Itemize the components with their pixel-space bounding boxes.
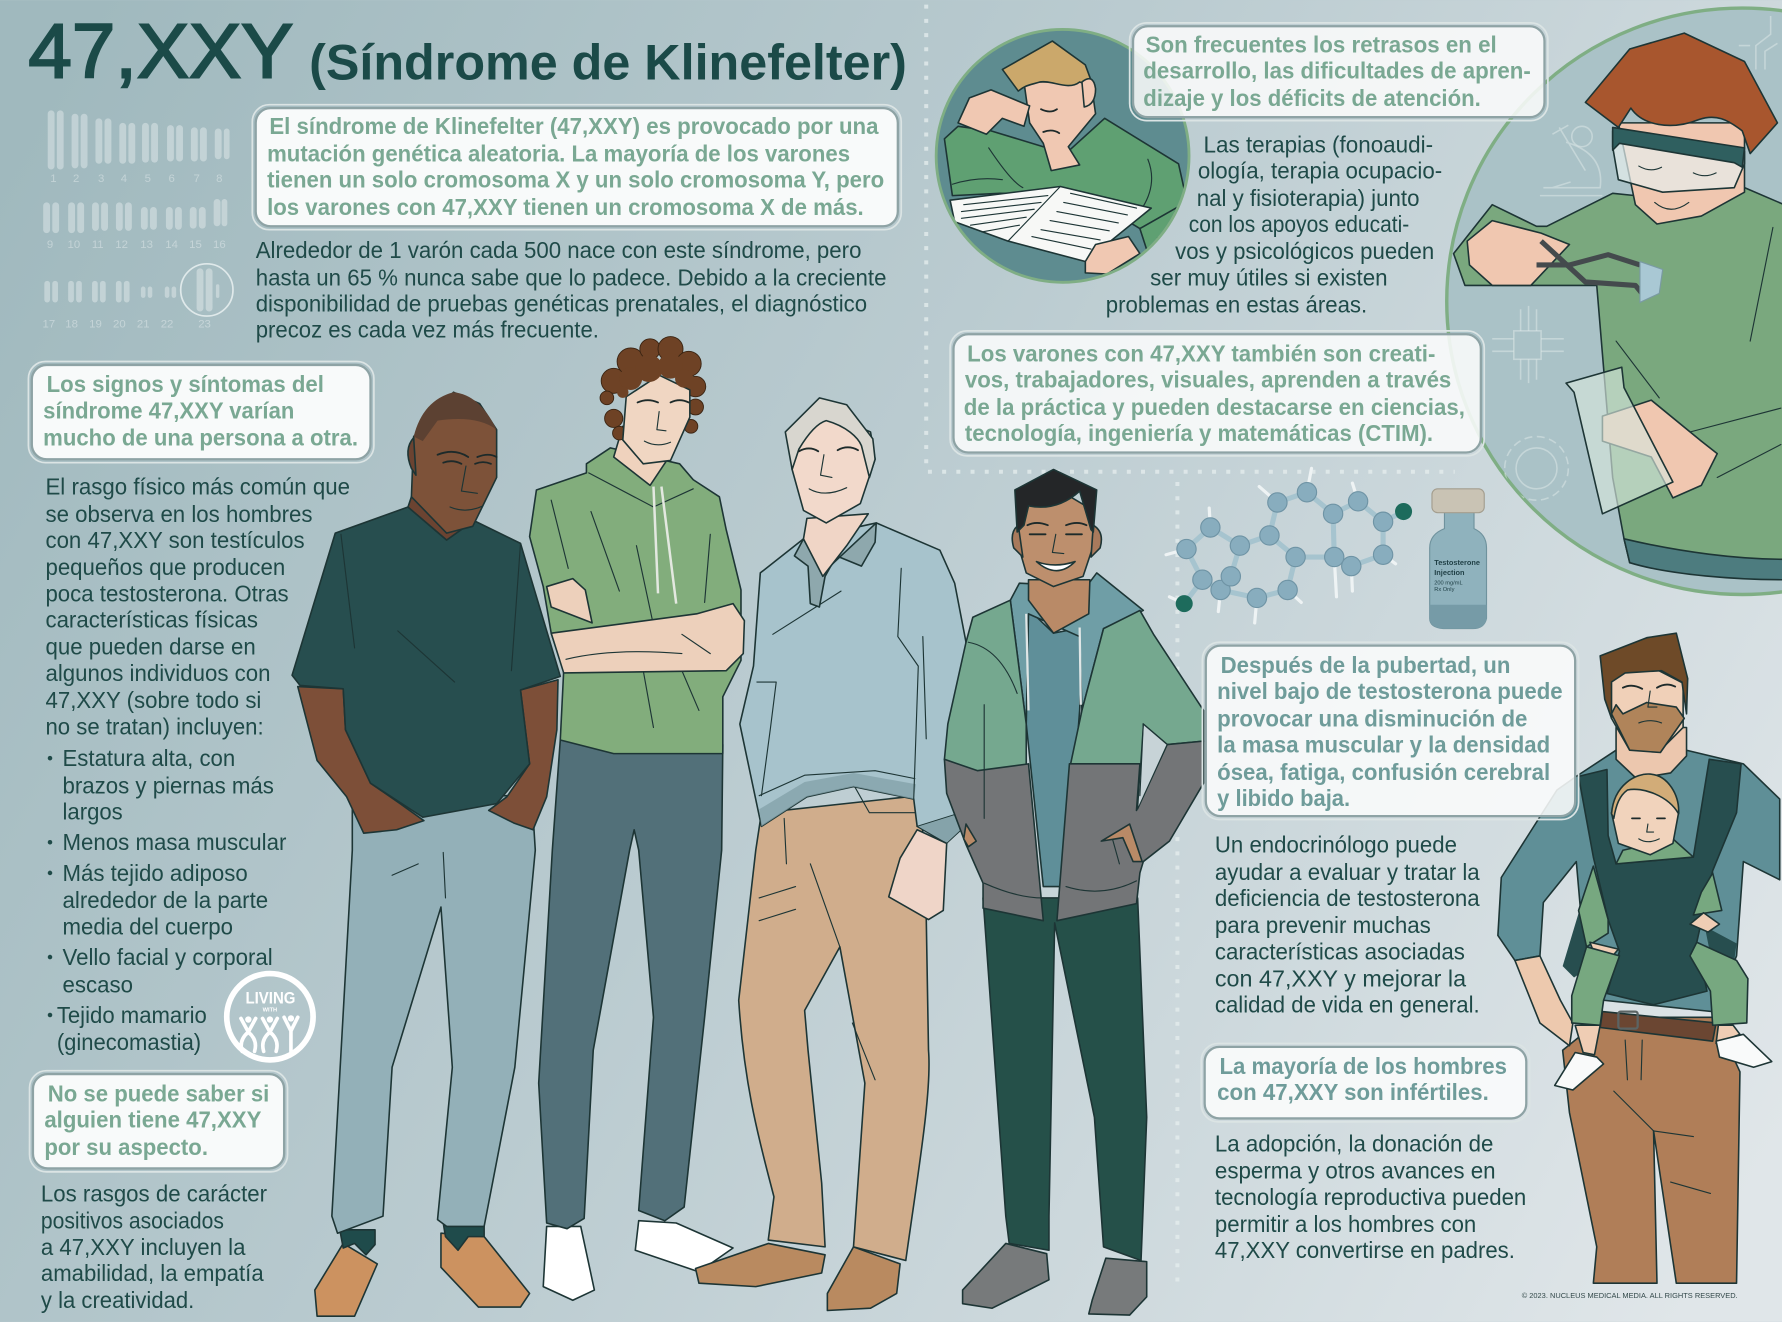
text: therapies: problemas en estas áreas. — [1106, 292, 1367, 318]
text: therapies: ología, terapia ocupacio- — [1198, 158, 1442, 184]
karyotype chromosome chart: 2 — [73, 173, 79, 185]
text: adoption: esperma y otros avances en — [1215, 1158, 1496, 1184]
figure: teen in lab with goggles, tongs and beaker — [1447, 8, 1782, 595]
title — [28, 8, 907, 94]
bullet list: features: Más tejido adiposo — [63, 860, 248, 886]
text: positive traits: amabilidad, la empatía — [41, 1260, 264, 1286]
callout: infertility — [1201, 1043, 1530, 1122]
callout: definition — [252, 105, 901, 230]
text: prevalence: disponibilidad de pruebas genéticas prenatales, el diagnóstico — [256, 291, 867, 317]
text: adoption: tecnología reproductiva pueden — [1215, 1184, 1526, 1210]
text: therapies: vos y psicológicos pueden — [1175, 238, 1434, 264]
callout: appearance: No se puede saber si — [48, 1080, 269, 1106]
text: adoption — [1215, 1130, 1526, 1263]
karyotype chromosome chart: 18 — [65, 318, 78, 330]
badge: Living with XXY — [227, 974, 313, 1060]
karyotype chromosome chart: 3 — [98, 173, 104, 185]
background icons: microscope, circuit, gear — [1492, 16, 1777, 500]
callout: low testosterone: nivel bajo de testosterona puede — [1217, 678, 1563, 704]
callout: infertility: con 47,XXY son infértiles. — [1217, 1079, 1489, 1105]
badge: Living with XXY: WITH — [263, 1008, 277, 1014]
karyotype chromosome chart: 21 — [137, 318, 150, 330]
bullet list: features: Vello facial y corporal — [63, 944, 273, 970]
callout: definition: tienen un solo cromosoma X y un solo cromosoma Y, pero — [267, 167, 884, 193]
vial: testosterone injection: Testosterone — [1434, 558, 1480, 567]
text: positive traits: positivos asociados — [41, 1208, 224, 1234]
karyotype chromosome chart: 19 — [89, 318, 102, 330]
karyotype chromosome chart: 15 — [189, 239, 202, 251]
callout: strengths — [950, 331, 1484, 456]
text: endocrinologist: características asociadas — [1215, 938, 1465, 964]
callout: signs and symptoms — [28, 362, 374, 463]
text: therapies: ser muy útiles si existen — [1150, 264, 1388, 290]
vial: testosterone injection: Rx Only — [1434, 587, 1455, 593]
karyotype chromosome chart: 9 — [47, 239, 53, 251]
callout: low testosterone: provocar una disminución de — [1217, 705, 1527, 731]
karyotype chromosome chart: 10 — [68, 239, 80, 251]
callout: signs and symptoms: Los signos y síntomas del — [47, 371, 324, 397]
callout: developmental delays — [1130, 23, 1548, 121]
callout: appearance: por su aspecto. — [44, 1134, 208, 1160]
callout: developmental delays: Son frecuentes los retrasos en el — [1146, 31, 1497, 57]
bullet list: features: media del cuerpo — [63, 913, 233, 939]
text: physical characteristics: se observa en los hombres — [45, 501, 313, 527]
bullet list: features: escaso — [63, 971, 133, 997]
karyotype chromosome chart: 7 — [193, 173, 200, 185]
molecule: testosterone — [1166, 468, 1412, 623]
bullet list: features: Tejido mamario — [57, 1002, 207, 1028]
callout: low testosterone: ósea, fatiga, confusión cerebral — [1217, 759, 1550, 785]
callout: low testosterone: Después de la pubertad, un — [1221, 652, 1510, 678]
text: prevalence: precoz es cada vez más frecuente. — [256, 317, 599, 343]
karyotype chromosome chart — [43, 110, 233, 330]
text: endocrinologist: con 47,XXY y mejorar la — [1215, 966, 1466, 992]
bullet list: features: (ginecomastia) — [57, 1029, 201, 1055]
callout: low testosterone — [1202, 642, 1579, 820]
text: adoption: 47,XXY convertirse en padres. — [1215, 1237, 1515, 1263]
text: adoption: permitir a los hombres con — [1215, 1211, 1476, 1237]
karyotype chromosome chart: 4 — [121, 173, 127, 185]
text: adoption: La adopción, la donación de — [1215, 1130, 1493, 1156]
text: endocrinologist: calidad de vida en general. — [1215, 992, 1480, 1018]
text: therapies: Las terapias (fonoaudi- — [1204, 131, 1433, 157]
callout: strengths: de la práctica y pueden destacarse en ciencias, — [964, 394, 1465, 420]
callout: signs and symptoms: síndrome 47,XXY varían — [43, 397, 294, 423]
vial: testosterone injection: Injection — [1434, 568, 1465, 577]
bullet list: features: alrededor de la parte — [63, 887, 268, 913]
karyotype chromosome chart: 16 — [213, 239, 226, 251]
karyotype chromosome chart: 11 — [92, 239, 104, 251]
karyotype chromosome chart: 8 — [216, 173, 223, 185]
text: physical characteristics: que pueden darse en — [45, 634, 256, 660]
text: positive traits: Los rasgos de carácter — [41, 1180, 267, 1206]
callout: appearance — [30, 1071, 288, 1172]
callout: developmental delays: desarrollo, las dificultades de apren- — [1143, 58, 1531, 84]
callout: signs and symptoms: mucho de una persona a otra. — [43, 425, 358, 451]
title: (Síndrome de Klinefelter) — [309, 35, 907, 91]
text: therapies: con los apoyos educati- — [1189, 211, 1409, 237]
text: physical characteristics: pequeños que producen — [45, 554, 285, 580]
callout: low testosterone: y libido baja. — [1217, 785, 1350, 811]
bullet list: features: Menos masa muscular — [63, 829, 287, 855]
copyright: © 2023. NUCLEUS MEDICAL MEDIA. ALL RIGHTS RESERVED. — [1522, 1291, 1738, 1300]
callout: infertility: La mayoría de los hombres — [1219, 1053, 1507, 1079]
text: physical characteristics: no se tratan) incluyen: — [45, 713, 264, 739]
text: physical characteristics: poca testosterona. Otras — [45, 580, 289, 606]
bullet list: features: Estatura alta, con — [63, 745, 235, 771]
person 1: dark green t-shirt and jeans — [292, 392, 560, 1316]
text: physical characteristics: con 47,XXY son testículos — [45, 527, 305, 553]
text: therapies — [1106, 131, 1442, 318]
text: endocrinologist — [1215, 831, 1480, 1018]
text: prevalence: hasta un 65 % nunca sabe que lo padece. Debido a la creciente — [256, 264, 886, 290]
karyotype chromosome chart: 13 — [140, 239, 153, 251]
text: endocrinologist: ayudar a evaluar y tratar la — [1215, 859, 1480, 885]
text: prevalence: Alrededor de 1 varón cada 500 nace con este síndrome, pero — [256, 237, 861, 263]
bullet list: features: brazos y piernas más — [63, 772, 274, 798]
callout: strengths: Los varones con 47,XXY también son creati- — [967, 341, 1435, 367]
karyotype chromosome chart: 17 — [43, 318, 55, 330]
person 2: curly hair, green hoodie — [530, 337, 744, 1300]
vial: testosterone injection — [1430, 489, 1487, 629]
text: physical characteristics — [45, 474, 350, 739]
text: positive traits — [41, 1180, 267, 1313]
figure: father carrying baby — [1498, 633, 1780, 1283]
callout: definition: El síndrome de Klinefelter (47,XXY) es provocado por una — [269, 113, 879, 139]
badge: Living with XXY: LIVING — [245, 989, 295, 1008]
text: positive traits: y la creatividad. — [41, 1287, 194, 1313]
text: endocrinologist: para prevenir muchas — [1215, 912, 1431, 938]
karyotype chromosome chart: 12 — [115, 239, 128, 251]
text: physical characteristics: El rasgo físico más común que — [45, 474, 350, 500]
karyotype chromosome chart: 5 — [145, 173, 151, 185]
text: physical characteristics: algunos individuos con — [45, 660, 270, 686]
callout: definition: mutación genética aleatoria. La mayoría de los varones — [267, 141, 850, 167]
callout: definition: los varones con 47,XXY tienen un cromosoma X de más. — [267, 194, 864, 220]
karyotype chromosome chart: 1 — [50, 173, 57, 185]
text: physical characteristics: 47,XXY (sobre todo si — [45, 687, 261, 713]
karyotype chromosome chart: 23 — [198, 318, 211, 330]
callout: developmental delays: dizaje y los déficits de atención. — [1143, 85, 1481, 111]
text: endocrinologist: Un endocrinólogo puede — [1215, 831, 1457, 857]
title: 47,XXY — [28, 8, 293, 94]
callout: strengths: vos, trabajadores, visuales, aprenden a través — [965, 367, 1451, 393]
karyotype chromosome chart: 20 — [113, 318, 126, 330]
callout: appearance: alguien tiene 47,XXY — [44, 1107, 261, 1133]
callout: low testosterone: la masa muscular y la densidad — [1217, 731, 1550, 757]
bullet list: features: largos — [63, 799, 123, 825]
text: physical characteristics: características físicas — [45, 606, 258, 632]
karyotype chromosome chart: 14 — [165, 239, 178, 251]
person 3: older man, blue sweater and khakis — [696, 398, 966, 1310]
vial: testosterone injection: 200 mg/mL — [1434, 580, 1463, 586]
text: positive traits: a 47,XXY incluyen la — [41, 1234, 246, 1260]
text: prevalence — [256, 237, 886, 343]
karyotype chromosome chart: 22 — [161, 318, 173, 330]
figure: boy reading a book in circle — [932, 23, 1193, 284]
bullet list: features — [48, 745, 287, 1055]
person 4: man with green and gray hooded jacket — [944, 470, 1204, 1315]
karyotype chromosome chart: 6 — [168, 173, 175, 185]
callout: strengths: tecnología, ingeniería y matemáticas (CTIM). — [965, 420, 1433, 446]
text: endocrinologist: deficiencia de testosterona — [1215, 885, 1480, 911]
text: therapies: nal y fisioterapia) junto — [1197, 185, 1419, 211]
